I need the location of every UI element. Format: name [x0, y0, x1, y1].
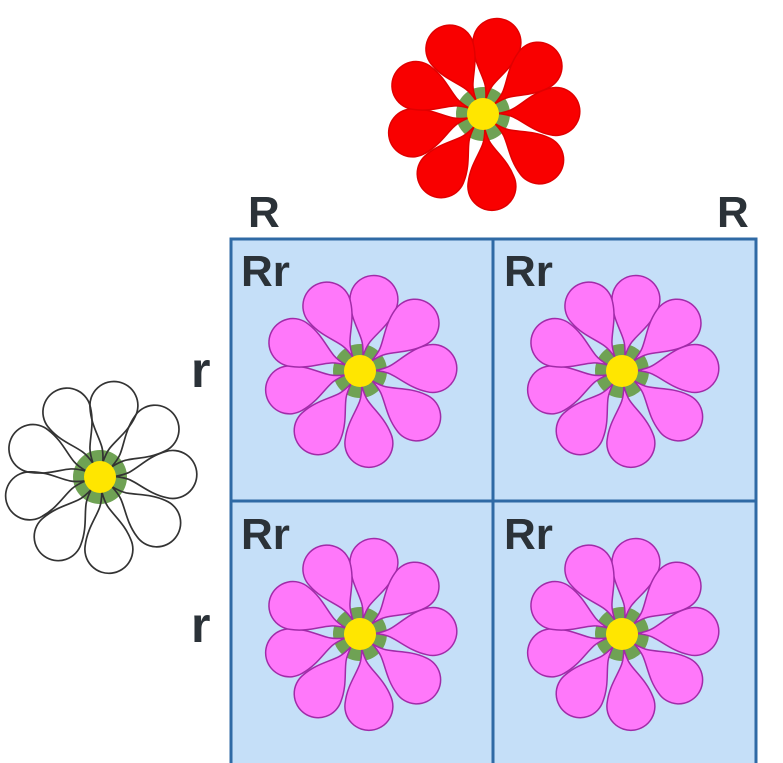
cell: top left — [231, 239, 493, 501]
cell: bottom right — [493, 501, 756, 763]
allele label: R left: R — [248, 188, 280, 237]
cell: top right — [493, 239, 756, 501]
punnett square — [231, 239, 756, 763]
parent flower: white — [0, 373, 207, 585]
cell: bottom left: Rr — [241, 510, 290, 559]
cell: top right: Rr — [504, 247, 553, 296]
cell: bottom left — [231, 501, 493, 763]
allele label: r bottom: r — [191, 597, 210, 653]
parent flower: red — [375, 10, 590, 222]
cell: bottom right: Rr — [504, 510, 553, 559]
allele label: R right: R — [717, 188, 749, 237]
cell: top left: Rr — [241, 247, 290, 296]
allele label: r top: r — [191, 342, 210, 398]
